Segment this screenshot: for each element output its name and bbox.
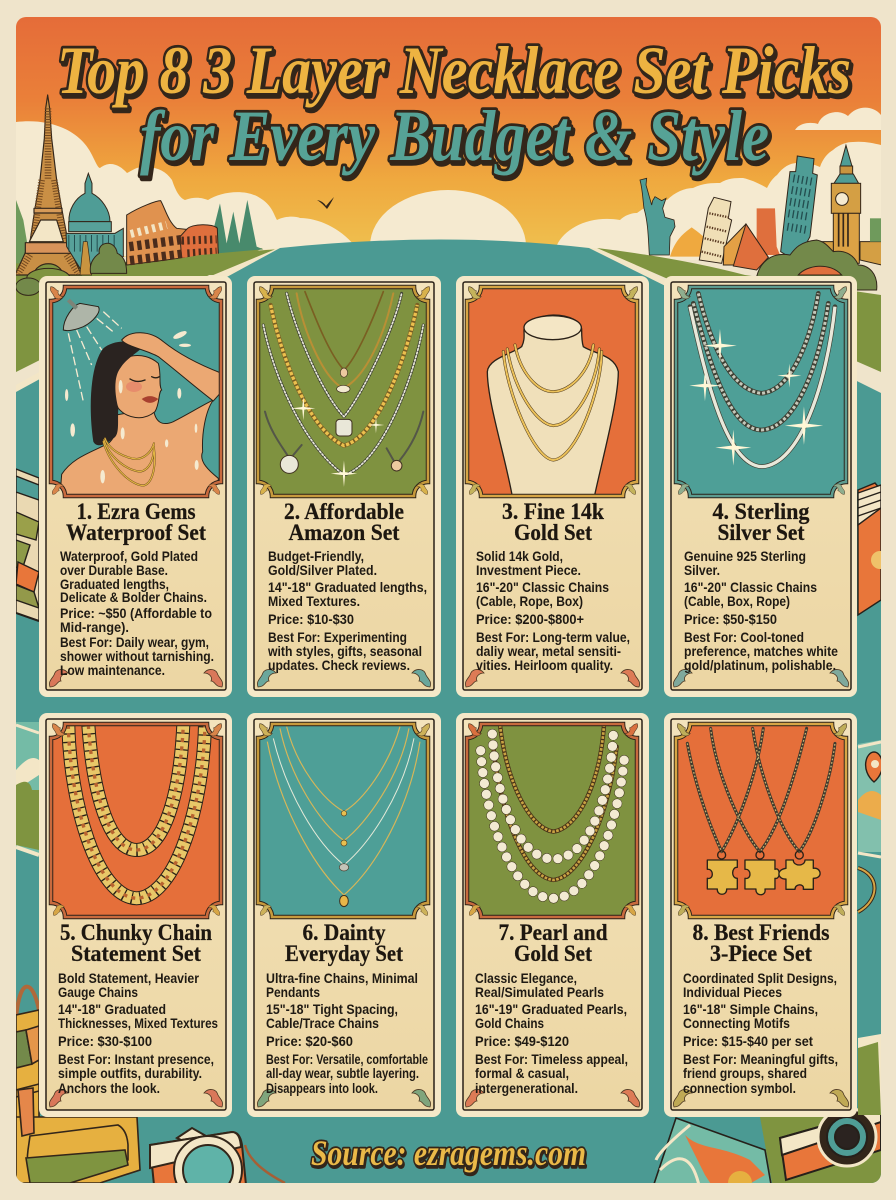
card description: 14"-18" Graduated lengths, bbox=[268, 579, 427, 595]
card description: Graduated lengths, bbox=[60, 576, 169, 592]
panel: card 3 Fine 14k Gold bbox=[456, 276, 649, 697]
card description: Price: $30-$100 bbox=[58, 1033, 152, 1049]
card title: Gold Set bbox=[514, 941, 592, 966]
card description: Genuine 925 Sterling bbox=[684, 548, 806, 564]
card description bbox=[476, 548, 630, 673]
corner ornaments bbox=[49, 1089, 223, 1107]
corner ornaments bbox=[465, 669, 640, 687]
card description bbox=[684, 548, 838, 673]
card description: Ultra-fine Chains, Minimal bbox=[266, 970, 418, 986]
card title bbox=[66, 499, 206, 545]
card description: Gold Chains bbox=[475, 1015, 544, 1031]
card description: friend groups, shared bbox=[683, 1065, 807, 1081]
panel: card 4 Sterling Silver bbox=[664, 276, 857, 697]
card description: Silver. bbox=[684, 562, 720, 578]
landmarks right bbox=[640, 145, 882, 290]
card description: Price: $20-$60 bbox=[266, 1033, 353, 1049]
icon: trees bbox=[757, 240, 877, 290]
icon: eiffel tower bbox=[15, 95, 82, 275]
panel: card 8 Best Friends bbox=[664, 713, 857, 1117]
card title: 7. Pearl and bbox=[498, 920, 608, 945]
panel: card 5 Chunky Chain bbox=[39, 713, 232, 1117]
card description bbox=[267, 548, 427, 673]
side item: right open book bbox=[857, 482, 881, 616]
card title: 2. Affordable bbox=[284, 499, 404, 524]
card description: Price: $49-$120 bbox=[475, 1033, 569, 1049]
source footer: Source: ezragems.com bbox=[311, 1133, 586, 1173]
card description: Classic Elegance, bbox=[475, 970, 577, 986]
illustration: bust with gold chains bbox=[467, 287, 638, 498]
card description: Best For: Long-term value, bbox=[476, 629, 630, 645]
card description: preference, matches white bbox=[684, 643, 838, 659]
green hills bbox=[16, 248, 881, 372]
card description: Best For: Experimenting bbox=[268, 629, 407, 645]
title line 2: for Every Budget & Style bbox=[140, 96, 769, 176]
card description: connection symbol. bbox=[683, 1080, 796, 1096]
landmarks left bbox=[15, 95, 275, 295]
card description: Bold Statement, Heavier bbox=[58, 970, 199, 986]
icon: capitol dome bbox=[66, 173, 123, 268]
card description: Cable/Trace Chains bbox=[266, 1015, 379, 1031]
illustration: dainty chains bbox=[258, 724, 430, 917]
card description: Mixed Textures. bbox=[268, 593, 360, 609]
corner ornaments bbox=[49, 669, 223, 687]
card description: 16"-20" Classic Chains bbox=[476, 579, 609, 595]
card title bbox=[712, 499, 810, 545]
card description: Waterproof, Gold Plated bbox=[60, 548, 198, 564]
card description: (Cable, Box, Rope) bbox=[684, 593, 790, 609]
card description: intergenerational. bbox=[475, 1080, 578, 1096]
card description: Price: $15-$40 per set bbox=[683, 1033, 813, 1049]
corner ornaments bbox=[257, 1089, 431, 1107]
illustration: mixed necklaces bbox=[258, 287, 430, 496]
card description: (Cable, Rope, Box) bbox=[476, 593, 583, 609]
card description: Delicate & Bolder Chains. bbox=[60, 589, 207, 605]
card description bbox=[683, 970, 838, 1096]
illustration: woman in shower bbox=[50, 287, 222, 497]
corner ornaments bbox=[673, 1089, 849, 1107]
card description: Mid-range). bbox=[60, 619, 129, 635]
card description: Best For: Cool-toned bbox=[684, 629, 804, 645]
card description: 16"-18" Simple Chains, bbox=[683, 1001, 818, 1017]
card description: daliy wear, metal sensiti- bbox=[476, 643, 621, 659]
card description: Investment Piece. bbox=[476, 562, 581, 578]
illustration: puzzle piece necklaces bbox=[676, 724, 847, 917]
card description bbox=[266, 970, 428, 1096]
card title: 3-Piece Set bbox=[710, 941, 812, 966]
card description: Individual Pieces bbox=[683, 984, 782, 1000]
card description: Price: $200-$800+ bbox=[476, 611, 584, 627]
card description: Solid 14k Gold, bbox=[476, 548, 563, 564]
card description bbox=[60, 548, 214, 678]
icon: right camera bbox=[760, 1108, 881, 1183]
clouds bbox=[16, 108, 881, 257]
card title: 8. Best Friends bbox=[692, 920, 830, 945]
card description: Connecting Motifs bbox=[683, 1015, 790, 1031]
card title: 4. Sterling bbox=[712, 499, 810, 524]
card description bbox=[58, 970, 218, 1096]
icon: bird bbox=[317, 197, 334, 209]
card description: 16"-20" Classic Chains bbox=[684, 579, 817, 595]
card title: 5. Chunky Chain bbox=[60, 920, 212, 945]
icon: left camera bbox=[148, 1126, 286, 1183]
side item: right globe bbox=[858, 740, 882, 912]
card description: Best For: Versatile, comfortable bbox=[266, 1051, 428, 1067]
corner ornaments bbox=[465, 1089, 640, 1107]
card description: Coordinated Split Designs, bbox=[683, 970, 837, 986]
card description: Best For: Timeless appeal, bbox=[475, 1051, 628, 1067]
card title: Waterproof Set bbox=[66, 520, 206, 545]
side item: left map bbox=[16, 469, 39, 621]
card description bbox=[475, 970, 628, 1096]
icon: bag bbox=[16, 1088, 140, 1183]
icon: big ben bbox=[840, 144, 852, 166]
panel: card 7 Pearl and Gold bbox=[456, 713, 649, 1117]
card title: 1. Ezra Gems bbox=[76, 499, 196, 524]
corner ornaments bbox=[257, 669, 431, 687]
card description: Low maintenance. bbox=[60, 662, 165, 678]
card description: Budget-Friendly, bbox=[268, 548, 364, 564]
icon: statue of liberty bbox=[640, 178, 675, 255]
sky bbox=[16, 17, 881, 257]
card description: 15"-18" Tight Spacing, bbox=[266, 1001, 398, 1017]
corner ornaments bbox=[673, 669, 849, 687]
card title bbox=[502, 499, 604, 545]
icon: skyscraper bbox=[781, 156, 817, 262]
card description: Best For: Meaningful gifts, bbox=[683, 1051, 838, 1067]
side item: left bag bbox=[16, 987, 39, 1183]
card description: Pendants bbox=[266, 984, 320, 1000]
card title bbox=[692, 920, 830, 966]
card title: Statement Set bbox=[71, 941, 201, 966]
card title: Silver Set bbox=[718, 520, 805, 545]
icon: right map bbox=[654, 1117, 772, 1183]
card description: shower without tarnishing. bbox=[60, 648, 214, 664]
panel: card 6 Dainty Everyday bbox=[247, 713, 441, 1117]
card description: Price: $10-$30 bbox=[268, 611, 354, 627]
card title: Gold Set bbox=[514, 520, 592, 545]
card description: Best For: Daily wear, gym, bbox=[60, 634, 209, 650]
side item: left postcard bbox=[16, 722, 39, 855]
card description: gold/platinum, polishable. bbox=[684, 657, 836, 673]
card title bbox=[285, 920, 403, 966]
panel: card 1 Ezra Gems bbox=[39, 276, 232, 697]
card description: Price: ~$50 (Affordable to bbox=[60, 605, 212, 621]
card description: all-day wear, subtle layering. bbox=[266, 1065, 419, 1081]
card description: 16"-19" Graduated Pearls, bbox=[475, 1001, 627, 1017]
card description: Disappears into look. bbox=[266, 1080, 378, 1096]
card description: over Durable Base. bbox=[60, 562, 168, 578]
side item: right photo bbox=[858, 1034, 881, 1115]
title bbox=[57, 32, 851, 176]
teal ground bbox=[256, 248, 624, 260]
card description: Real/Simulated Pearls bbox=[475, 984, 604, 1000]
icon: pyramid bbox=[723, 224, 768, 265]
card description: Price: $50-$150 bbox=[684, 611, 777, 627]
card description: 14"-18" Graduated bbox=[58, 1001, 166, 1017]
card description: updates. Check reviews. bbox=[268, 657, 410, 673]
card title: 3. Fine 14k bbox=[502, 499, 604, 524]
panel: card 2 Affordable Amazon bbox=[247, 276, 441, 697]
card description: with styles, gifts, seasonal bbox=[267, 643, 422, 659]
card title: Everyday Set bbox=[285, 941, 403, 966]
card title: 6. Dainty bbox=[302, 920, 386, 945]
card title bbox=[284, 499, 404, 545]
card description: Anchors the look. bbox=[58, 1080, 160, 1096]
card description: vities. Heirloom quality. bbox=[476, 657, 613, 673]
card description: simple outfits, durability. bbox=[58, 1065, 202, 1081]
card description: formal & casual, bbox=[475, 1065, 569, 1081]
card title bbox=[498, 920, 608, 966]
card title: Amazon Set bbox=[288, 520, 400, 545]
illustration: silver chains bbox=[676, 287, 847, 496]
illustration: pearl and gold strands bbox=[467, 724, 638, 917]
illustration: chunky chains bbox=[51, 724, 222, 917]
card description: Gold/Silver Plated. bbox=[268, 562, 377, 578]
card title bbox=[60, 920, 212, 966]
card description: Best For: Instant presence, bbox=[58, 1051, 214, 1067]
icon: colosseum bbox=[127, 201, 218, 265]
icon: leaning tower bbox=[699, 197, 732, 263]
card description: Gauge Chains bbox=[58, 984, 138, 1000]
card description: Thicknesses, Mixed Textures bbox=[58, 1015, 218, 1031]
